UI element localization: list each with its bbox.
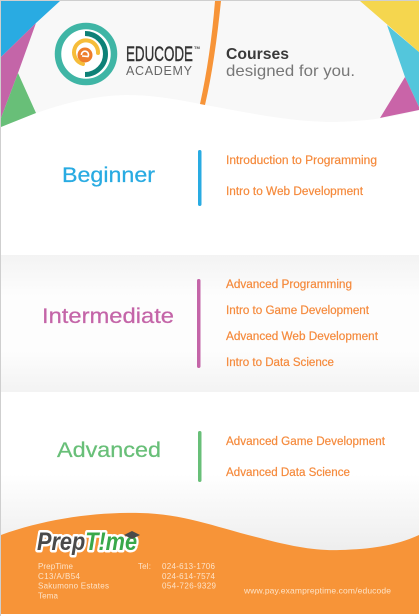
orange swoosh [200,1,221,105]
course list: Intro to Game Development [226,305,370,317]
panel: header [1,1,419,127]
course list: Intro to Web Development [226,186,364,198]
triangle: blue [1,1,60,57]
panel: advanced [57,431,386,482]
lower background gradient [0,392,419,557]
logo: PrepTime: PrepT!me [37,528,137,556]
contact phone: 054-726-9329 [162,582,217,590]
panel: beginner [62,150,377,206]
course list [226,436,386,479]
logo text: trademark: TM [194,45,200,50]
icon: Educode logo [55,23,117,85]
heading: Beginner: Beginner [62,163,155,187]
icon: graduation cap [124,531,140,539]
triangle: yellow [360,1,419,52]
contact address: Tema [38,592,59,600]
website: www.pay.exampreptime.com/educode [243,586,391,596]
contact address [38,562,109,600]
contact phone [138,562,217,590]
logo text: ACADEMY: ACADEMY [126,64,193,78]
divider: purple [197,279,200,368]
course list: Advanced Programming [226,279,352,291]
tagline: Courses: Courses [226,46,289,63]
panel: footer [1,513,419,614]
course list: Advanced Game Development [226,436,386,448]
triangle: green [1,73,36,127]
contact phone: Tel: [138,562,151,571]
triangle: cyan [387,25,419,107]
heading: Advanced: Advanced [57,438,161,462]
panel: intermediate [0,255,419,392]
contact phone: 024-613-1706 [162,562,216,571]
course list: Advanced Data Science [226,467,350,479]
triangle: purple [1,23,36,118]
triangle: pink [380,77,419,118]
course list: Intro to Data Science [226,357,334,369]
tagline: designed for you: designed for you. [226,63,355,80]
contact address: C13/A/B54 [38,572,81,581]
course list [226,155,377,198]
logo: PrepTime: PrepT!me [37,528,137,556]
contact phone: 024-614-7574 [162,572,216,581]
contact address: Sakumono Estates [38,582,109,590]
course list [226,279,379,369]
course list: Advanced Web Development [226,331,379,343]
logo text: EDUCODE: EDUCODE [126,43,193,66]
divider: green [198,431,202,482]
divider: blue [198,150,202,206]
course list: Introduction to Programming [226,155,377,167]
contact address: PrepTime [38,562,74,571]
heading: Intermediate: Intermediate [42,304,174,328]
